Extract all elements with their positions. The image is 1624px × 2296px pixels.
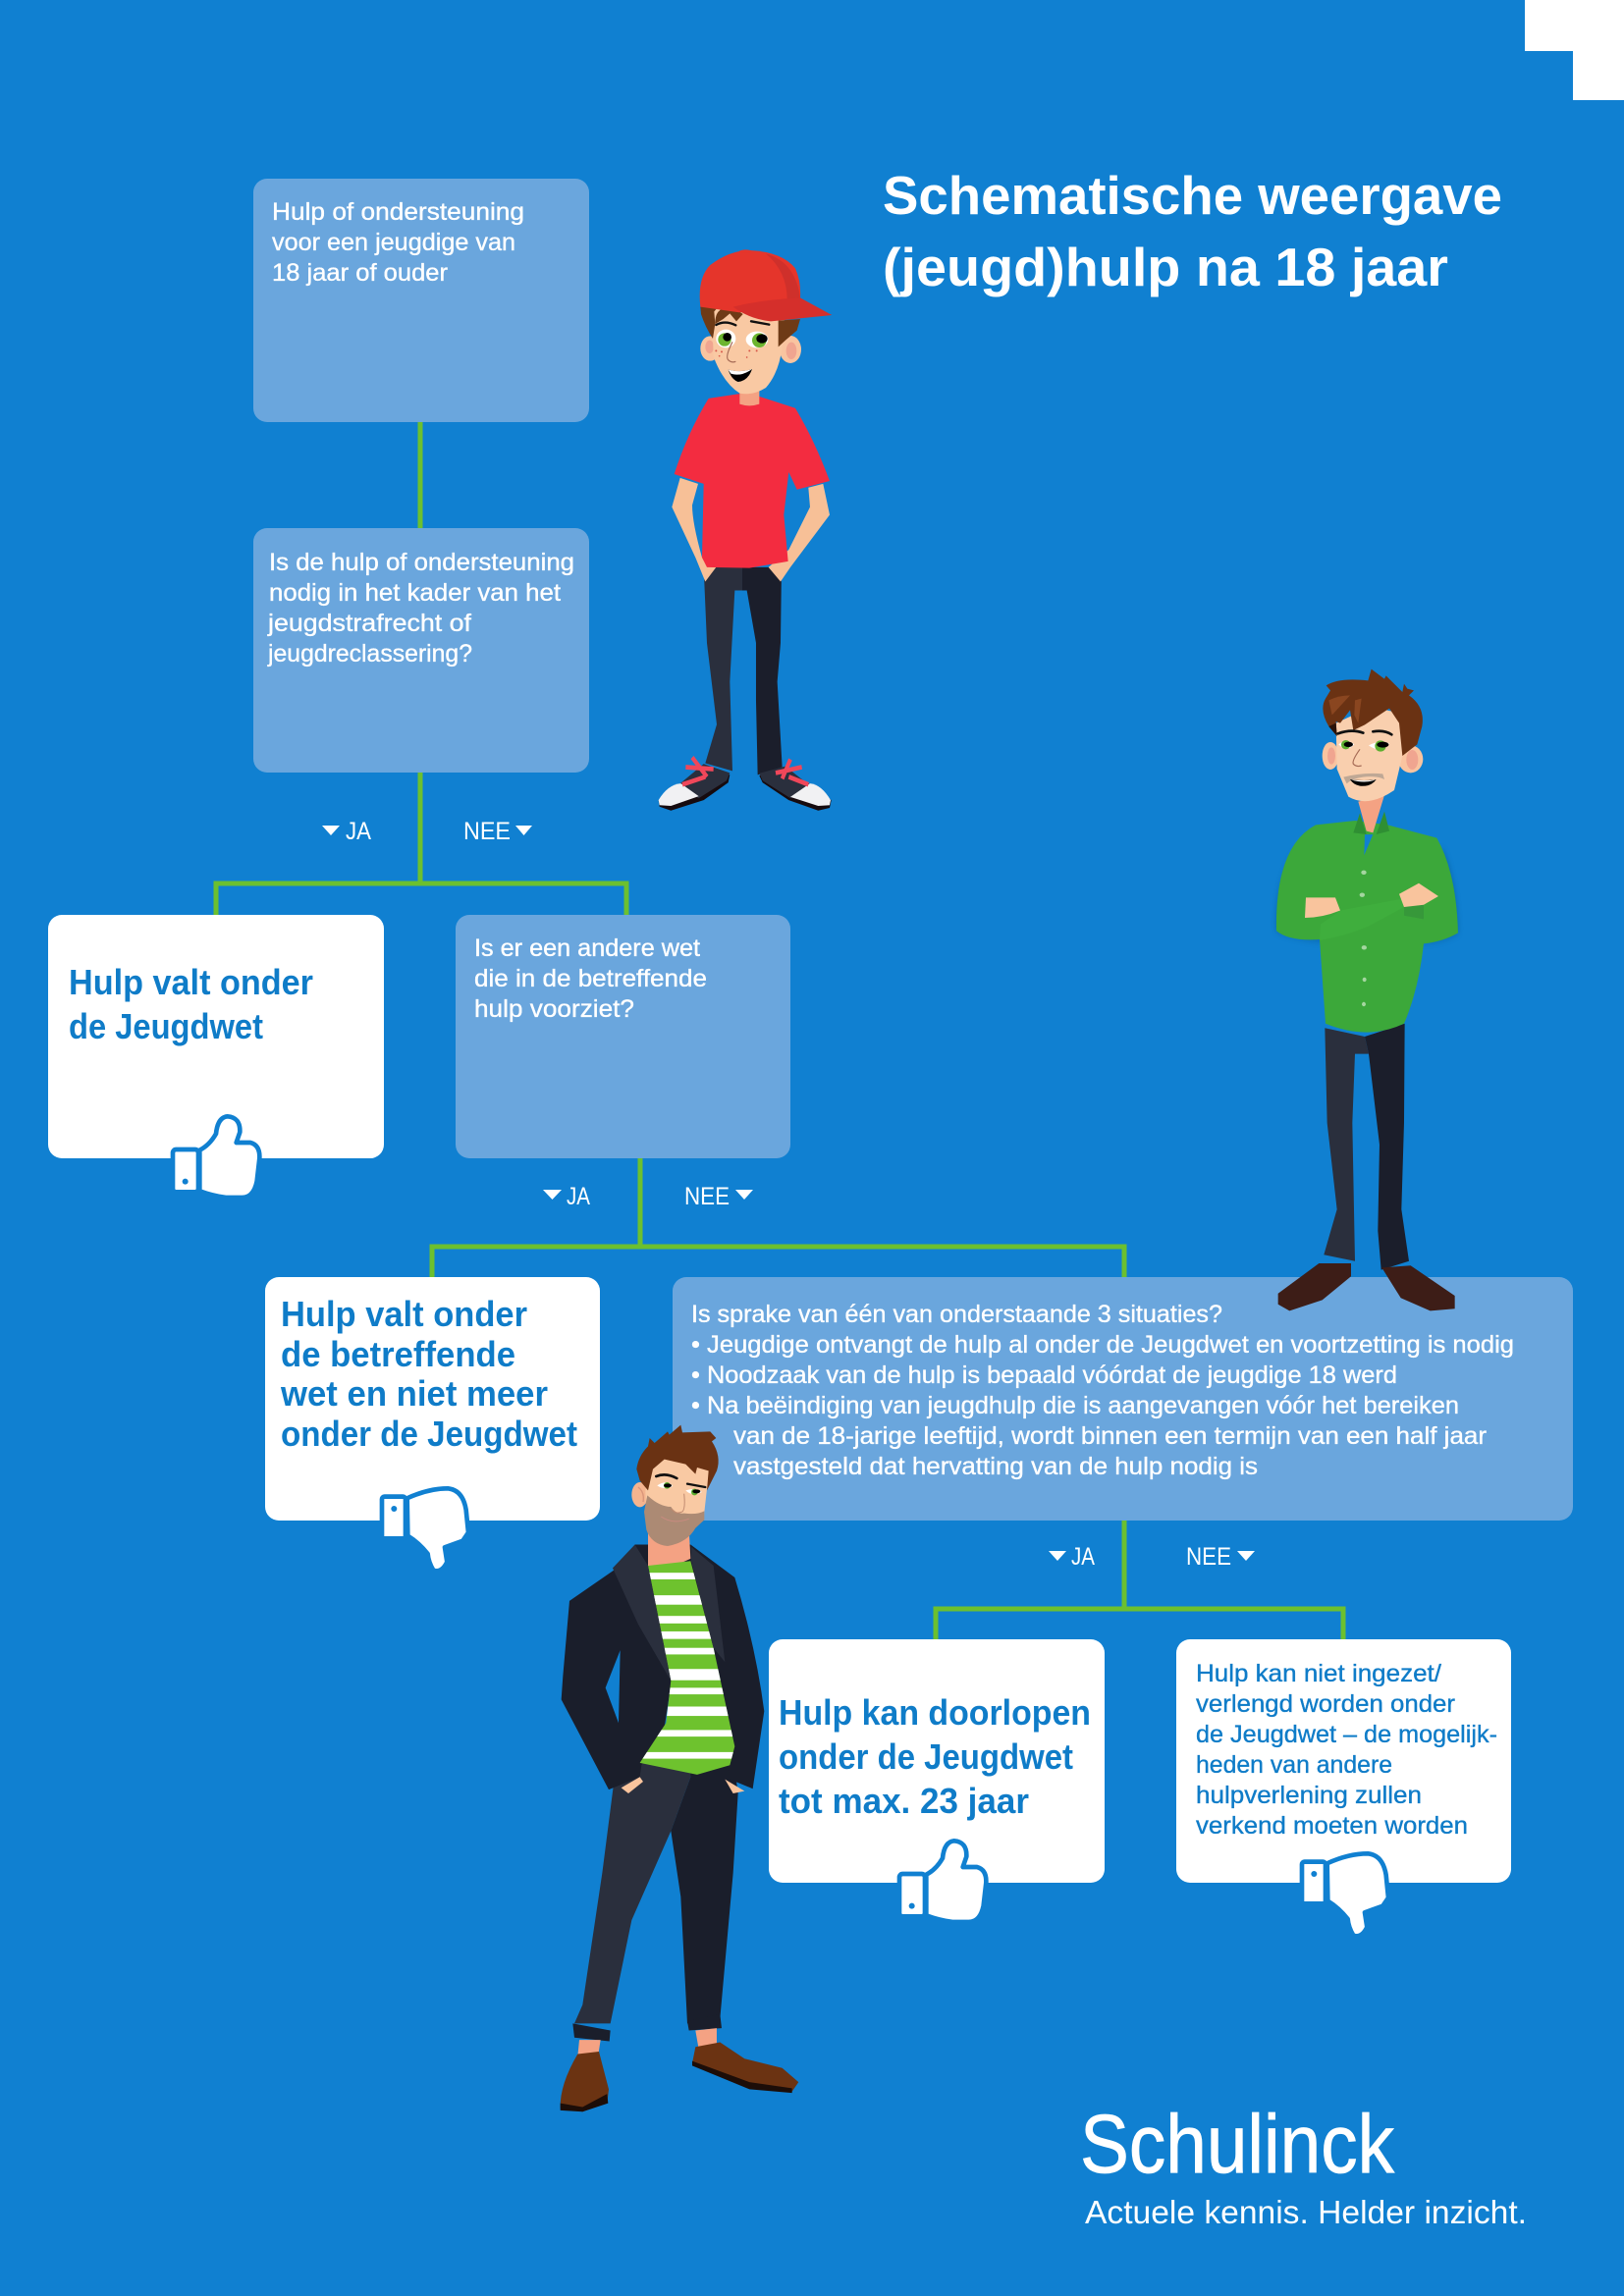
box: jeugdstrafrecht question: jeugdstrafrecht of [267, 610, 471, 637]
box: andere wet question: die in de betreffende [474, 965, 707, 992]
box: doorlopen tot 23 jaar [769, 1639, 1105, 1922]
box: three situations: Is sprake van één van onderstaande 3 situaties? [691, 1301, 1222, 1328]
box: jeugdstrafrecht question: jeugdreclassering? [267, 640, 472, 667]
box: niet onder jeugdwet: Hulp kan niet ingezet/ [1196, 1660, 1441, 1687]
bearded man head [631, 1425, 719, 1546]
title: Schematische weergave [883, 165, 1502, 226]
box: doorlopen tot 23 jaar: onder de Jeugdwet [779, 1736, 1073, 1777]
box: three situations: • Jeugdige ontvangt de hulp al onder de Jeugdwet en voortzetting is nodig [691, 1331, 1514, 1359]
box: start question: 18 jaar of ouder [272, 259, 448, 287]
box: start question: Hulp of ondersteuning [272, 198, 524, 226]
box: jeugdstrafrecht question: Is de hulp of ondersteuning [269, 549, 574, 576]
box: andere wet question: Is er een andere wet [474, 934, 700, 962]
label: ja 1: JA [346, 818, 371, 845]
label: nee 1: NEE [463, 818, 511, 845]
box: doorlopen tot 23 jaar: Hulp kan doorlopen [779, 1692, 1091, 1733]
box: jeugdstrafrecht question: nodig in het kader van het [269, 579, 561, 607]
green shirt man body [1276, 821, 1458, 1310]
title [883, 165, 1502, 297]
box: andere wet question [456, 915, 790, 1158]
logo: Schulinck: Schulinck [1080, 2098, 1395, 2190]
box: three situations: van de 18-jarige leeftijd, wordt binnen een termijn van een half jaar [733, 1422, 1487, 1450]
box: three situations: • Na beëindiging van jeugdhulp die is aangevangen vóór het bereiken [691, 1392, 1459, 1419]
label: ja 2 [543, 1183, 590, 1210]
box: doorlopen tot 23 jaar: tot max. 23 jaar [779, 1781, 1029, 1821]
title: (jeugd)hulp na 18 jaar [883, 237, 1448, 297]
label: nee 3: NEE [1186, 1543, 1231, 1571]
label: ja 3 [1049, 1543, 1095, 1571]
corner notch [1525, 0, 1624, 100]
box: betreffende wet: de betreffende [281, 1334, 515, 1374]
box: andere wet question: hulp voorziet? [474, 995, 634, 1023]
box: niet onder jeugdwet: heden van andere [1196, 1751, 1392, 1779]
box: three situations: • Noodzaak van de hulp is bepaald vóórdat de jeugdige 18 werd [691, 1362, 1397, 1389]
box: hulp valt onder de jeugdwet [48, 915, 384, 1198]
label: ja 1 [322, 818, 371, 845]
box: hulp valt onder de jeugdwet: de Jeugdwet [69, 1006, 263, 1046]
box: start question [253, 179, 589, 422]
logo: Schulinck: Actuele kennis. Helder inzicht. [1085, 2194, 1527, 2230]
icon: thumb up [899, 1841, 986, 1922]
box: niet onder jeugdwet: de Jeugdwet – de mogelijk- [1196, 1721, 1497, 1748]
box: niet onder jeugdwet: hulpverlening zullen [1196, 1782, 1422, 1809]
boy body [659, 394, 832, 811]
icon: thumb down [382, 1488, 468, 1571]
box: niet onder jeugdwet: verkend moeten worden [1196, 1812, 1468, 1840]
box: three situations [673, 1277, 1573, 1521]
icon: thumb up [173, 1116, 259, 1198]
logo: Schulinck [1080, 2098, 1527, 2230]
character: bearded man in jacket [561, 1425, 798, 2111]
green shirt man head [1323, 669, 1423, 834]
box: betreffende wet: Hulp valt onder [281, 1294, 527, 1334]
boy head [700, 249, 832, 405]
label: nee 2: NEE [684, 1183, 730, 1210]
character: boy with red cap [659, 249, 832, 811]
box: niet onder jeugdwet [1176, 1639, 1511, 1936]
box: hulp valt onder de jeugdwet: Hulp valt onder [69, 962, 313, 1002]
label: ja 2: JA [567, 1183, 590, 1210]
box: jeugdstrafrecht question [253, 528, 589, 773]
box: niet onder jeugdwet: verlengd worden onder [1196, 1690, 1455, 1718]
bearded man body [561, 1528, 798, 2111]
character: man in green shirt [1276, 669, 1458, 1310]
icon: thumb down [1302, 1853, 1388, 1936]
label: ja 3: JA [1071, 1543, 1095, 1571]
box: betreffende wet: wet en niet meer [280, 1373, 548, 1414]
box: start question: voor een jeugdige van [272, 229, 515, 256]
box: three situations: vastgesteld dat hervatting van de hulp nodig is [733, 1453, 1258, 1480]
box: betreffende wet [265, 1277, 600, 1571]
connector lines [216, 422, 1343, 1639]
box: betreffende wet: onder de Jeugdwet [281, 1414, 577, 1454]
